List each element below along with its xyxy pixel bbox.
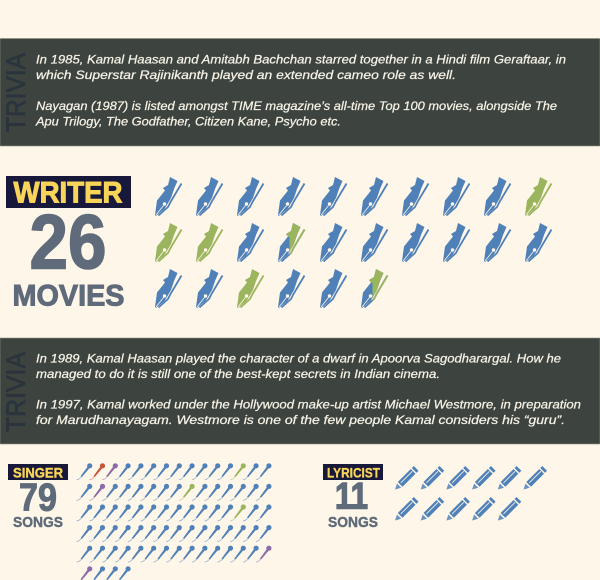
panel: writer stat xyxy=(6,176,131,312)
trivia 2 text block: In 1989, Kamal Haasan played the character of a dwarf in Apoorva Sagodharargal. How he xyxy=(36,352,561,366)
trivia 1 text block: Nayagan (1987) is listed amongst TIME magazine’s all-time Top 100 movies, alongside The xyxy=(36,99,557,113)
singer heading: SINGER xyxy=(13,464,63,480)
pictogram: 11 pencils xyxy=(395,466,547,520)
half-filled pen, row 3 xyxy=(361,269,388,308)
singer count: 79 xyxy=(19,476,57,520)
writer count: 26 xyxy=(30,200,106,286)
trivia 2 text block: In 1997, Kamal worked under the Hollywood make-up artist Michael Westmore, in preparation xyxy=(36,398,581,412)
trivia 2 text block: for Marudhanayagam. Westmore is one of the few people Kamal considers his “guru”. xyxy=(36,413,565,427)
lyricist count: 11 xyxy=(335,476,368,516)
trivia 1 vertical label: TRIVIA xyxy=(1,53,31,132)
singer label box xyxy=(8,464,68,480)
trivia 1 text block: Apu Trilogy, The Godfather, Citizen Kane, Psycho etc. xyxy=(35,114,341,128)
panel: singer stat xyxy=(8,464,68,531)
panel: lyricist stat xyxy=(323,464,383,531)
trivia 2 text block: managed to do it is still one of the best-kept secrets in Indian cinema. xyxy=(36,367,440,381)
singer unit: SONGS xyxy=(13,515,63,531)
trivia 1 text block xyxy=(35,52,566,128)
panel: trivia 1 xyxy=(0,38,600,146)
writer label box xyxy=(6,176,131,208)
writer unit: MOVIES xyxy=(12,280,124,312)
lyricist unit: SONGS xyxy=(328,515,378,531)
half-filled pen, row 2 xyxy=(278,223,304,262)
panel: trivia 2 xyxy=(0,338,600,444)
trivia 2 vertical label: TRIVIA xyxy=(1,352,31,432)
lyricist heading: LYRICIST xyxy=(327,466,381,480)
pictogram: 79 microphones xyxy=(77,463,272,580)
writer heading: WRITER xyxy=(14,176,123,210)
trivia 2 text block xyxy=(36,352,581,427)
trivia 1 text block: In 1985, Kamal Haasan and Amitabh Bachchan starred together in a Hindi film Geraftaar, in xyxy=(36,52,566,66)
pictogram: 26 fountain pens xyxy=(155,177,552,308)
trivia 1 text block: which Superstar Rajinikanth played an extended cameo role as well. xyxy=(36,68,456,82)
lyricist label box xyxy=(323,464,383,480)
